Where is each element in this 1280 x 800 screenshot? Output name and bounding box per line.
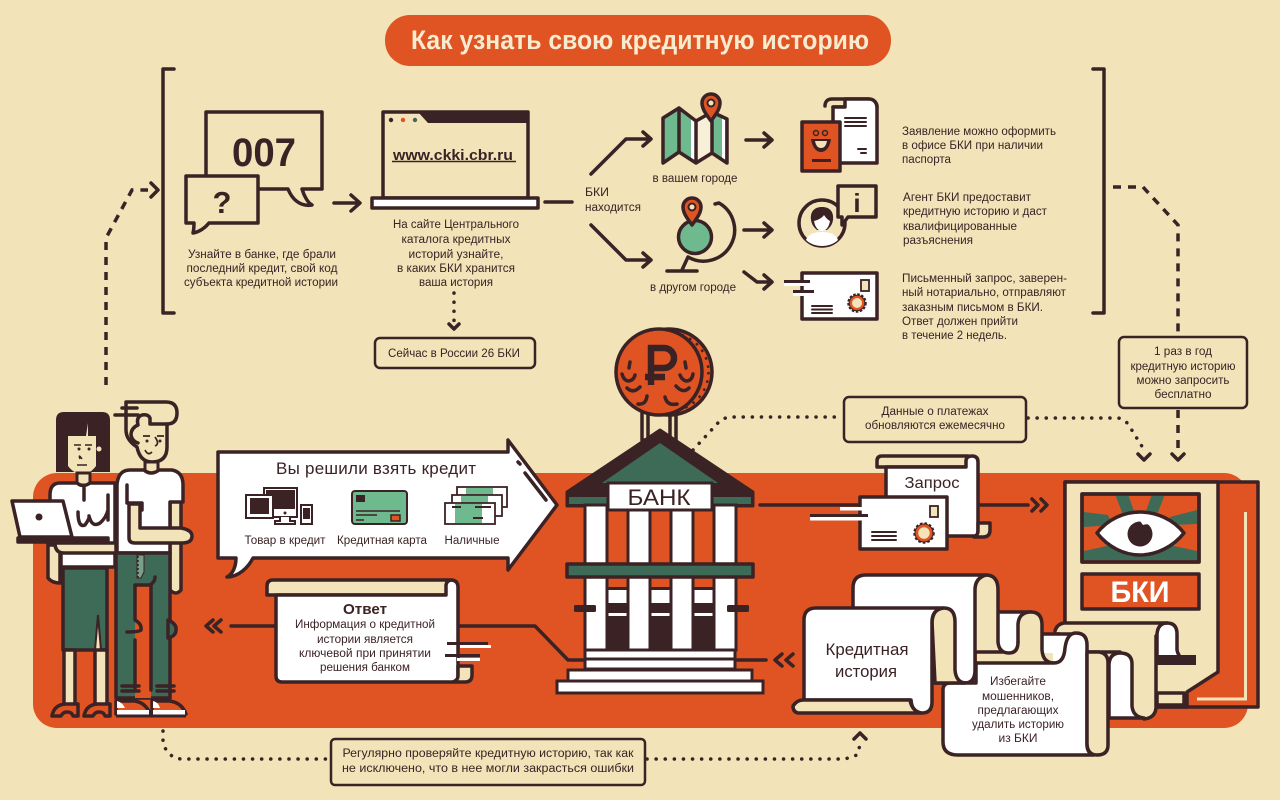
icon: cash: [445, 487, 507, 524]
text: step 2: На сайте Центрального: [393, 219, 519, 231]
scroll: answer: истории является: [317, 634, 413, 646]
text: step 2: историй узнайте,: [408, 249, 504, 261]
text: step 1: Узнайте в банке, где брали: [188, 249, 336, 261]
box: check regularly: [331, 739, 645, 785]
icon: globe: [667, 198, 735, 271]
text: agent: [903, 192, 1048, 247]
figure: woman: [12, 412, 116, 716]
text: step 2: ваша история: [419, 277, 493, 289]
text: post: Письменный запрос, заверен-: [902, 273, 1067, 285]
icon: speech bubbles 007: ?: [213, 185, 231, 220]
text: post: заказным письмом в БКИ.: [902, 302, 1043, 314]
eye panel: [1082, 494, 1199, 562]
icon: passport and form: [802, 99, 877, 171]
scroll: back: [853, 575, 1072, 683]
icon: bank: БАНК: [628, 485, 691, 510]
big arrow: you decided to take credit: Кредитная карта: [337, 535, 428, 547]
arrow: step 1 to site: [334, 195, 360, 211]
icon: speech bubbles 007: 007: [232, 131, 296, 175]
text: step 2: каталога кредитных: [402, 234, 511, 246]
icon: map: [663, 94, 727, 163]
text: office: Заявление можно оформить: [902, 126, 1056, 138]
icon: speech bubbles 007: [186, 112, 322, 233]
callout: payment data: Данные о платежах: [882, 406, 989, 418]
arrow: bank to request: [760, 503, 860, 507]
scroll: avoid fraudsters: мошенников,: [982, 691, 1054, 703]
box: once a year: 1 раз в год: [1154, 346, 1212, 358]
orange band: [33, 473, 1248, 728]
box: check regularly: не исключено, что в нее могли закрасться ошибки: [342, 763, 634, 775]
big arrow: you decided to take credit: Товар в кредит: [244, 535, 326, 547]
arrow: site to БКИ: [545, 200, 572, 204]
title: [385, 15, 891, 66]
arrow: city to office: [746, 133, 772, 147]
arrow: dotted from people to bottom note: [163, 731, 330, 759]
text: post: Ответ должен прийти: [902, 316, 1018, 328]
text: other city: в другом городе: [650, 282, 736, 294]
scroll: credit history: [793, 608, 965, 713]
text: step 1: субъекта кредитной истории: [184, 277, 338, 289]
big arrow: you decided to take credit: Вы решили взять кредит: [276, 459, 476, 478]
box: 26 БКИ: [375, 338, 535, 368]
text: step 1: последний кредит, свой код: [186, 263, 338, 275]
text: your city: в вашем городе: [652, 173, 738, 185]
box: check regularly: Регулярно проверяйте кредитную историю, так как: [342, 748, 635, 760]
text: agent: кредитную историю и даст: [903, 206, 1048, 218]
scrolls: credit history group: [793, 575, 1196, 755]
text: step 2: в каких БКИ хранится: [397, 263, 515, 275]
scroll: request: [810, 456, 1047, 549]
box: once a year: можно запросить: [1136, 375, 1230, 387]
left bracket: [163, 69, 174, 313]
arrow: city to post: [744, 272, 772, 289]
arrow: dotted bank to callout: [693, 417, 842, 450]
arrow: dashed from bracket to БКИ: [1113, 187, 1184, 460]
scroll: answer: Информация о кредитной: [295, 619, 435, 631]
scroll: credit history: Кредитная: [826, 640, 908, 659]
text: step 1: [184, 249, 338, 289]
БКИ building book: [1065, 482, 1258, 707]
box: once a year: бесплатно: [1154, 389, 1212, 401]
arrow: credit history to bank: [737, 654, 793, 666]
text: office: [902, 126, 1056, 166]
arrow: dotted to count box: [449, 293, 459, 329]
scroll: answer: ключевой при принятии: [299, 648, 431, 660]
scroll: answer: [267, 580, 491, 682]
illustration: people: [12, 402, 192, 716]
arrow: dotted from note to history: [647, 733, 866, 759]
right bracket: [1093, 69, 1104, 313]
text: post: [902, 273, 1067, 342]
scroll: answer: решения банком: [320, 662, 410, 674]
figure: man: [115, 402, 192, 716]
title: Как узнать свою кредитную историю: [411, 25, 869, 55]
text: БКИ находится: БКИ: [585, 187, 609, 199]
text: post: ный нотариально, отправляют: [902, 287, 1067, 299]
scroll: credit history: история: [835, 662, 897, 681]
arrow: to other city: [591, 225, 651, 267]
text: post: в течение 2 недель.: [902, 330, 1007, 342]
arrow: dashed from people to top: [106, 183, 158, 385]
scroll: request: Запрос: [904, 475, 960, 492]
icon: agent: i: [853, 188, 861, 218]
icon: bank: [557, 430, 763, 693]
icon: laptop with site: www.ckki.cbr.ru: [392, 147, 513, 164]
box: once a year: [1119, 337, 1247, 408]
icon: coin: [616, 329, 712, 440]
text: БКИ находится: находится: [585, 202, 641, 214]
arrow: answer to people: [206, 620, 275, 632]
text: office: паспорта: [902, 154, 952, 166]
big arrow: you decided to take credit: Наличные: [444, 535, 500, 547]
text: office: в офисе БКИ при наличии: [902, 140, 1043, 152]
icon: envelope: [810, 497, 947, 549]
icon: agent: [799, 186, 876, 246]
box: 26 БКИ: Сейчас в России 26 БКИ: [388, 348, 520, 360]
text: agent: разъяснения: [903, 235, 973, 247]
callout: payment data: обновляются ежемесячно: [865, 420, 1005, 432]
icon: devices: [246, 488, 312, 524]
arrow: city to agent: [744, 223, 772, 237]
arrow: bank to answer: [458, 626, 585, 660]
text: БКИ находится: [585, 187, 641, 214]
scroll: behind right: [1055, 623, 1196, 719]
scroll: avoid fraudsters: предлагающих: [978, 705, 1059, 717]
БКИ sign: [1082, 574, 1199, 609]
scroll: avoid fraudsters: Избегайте: [990, 676, 1046, 688]
text: step 2: [393, 219, 519, 289]
big arrow: you decided to take credit: [218, 440, 557, 577]
box: once a year: кредитную историю: [1130, 361, 1236, 373]
icon: envelope small: [784, 273, 877, 319]
scroll: avoid fraudsters: из БКИ: [998, 733, 1038, 745]
БКИ sign: БКИ: [1110, 576, 1170, 609]
text: agent: квалифицированные: [903, 221, 1017, 233]
callout: payment data: [844, 397, 1026, 442]
scroll: avoid fraudsters: удалить историю: [972, 719, 1064, 731]
icon: credit card: [352, 491, 407, 524]
arrow: to your city: [591, 132, 651, 174]
arrow: dotted callout to БКИ: [1028, 418, 1150, 460]
scroll: avoid fraudsters: [943, 633, 1108, 755]
icon: laptop with site: [372, 112, 538, 208]
scroll: answer: Ответ: [343, 601, 387, 618]
text: agent: Агент БКИ предоставит: [903, 192, 1032, 204]
